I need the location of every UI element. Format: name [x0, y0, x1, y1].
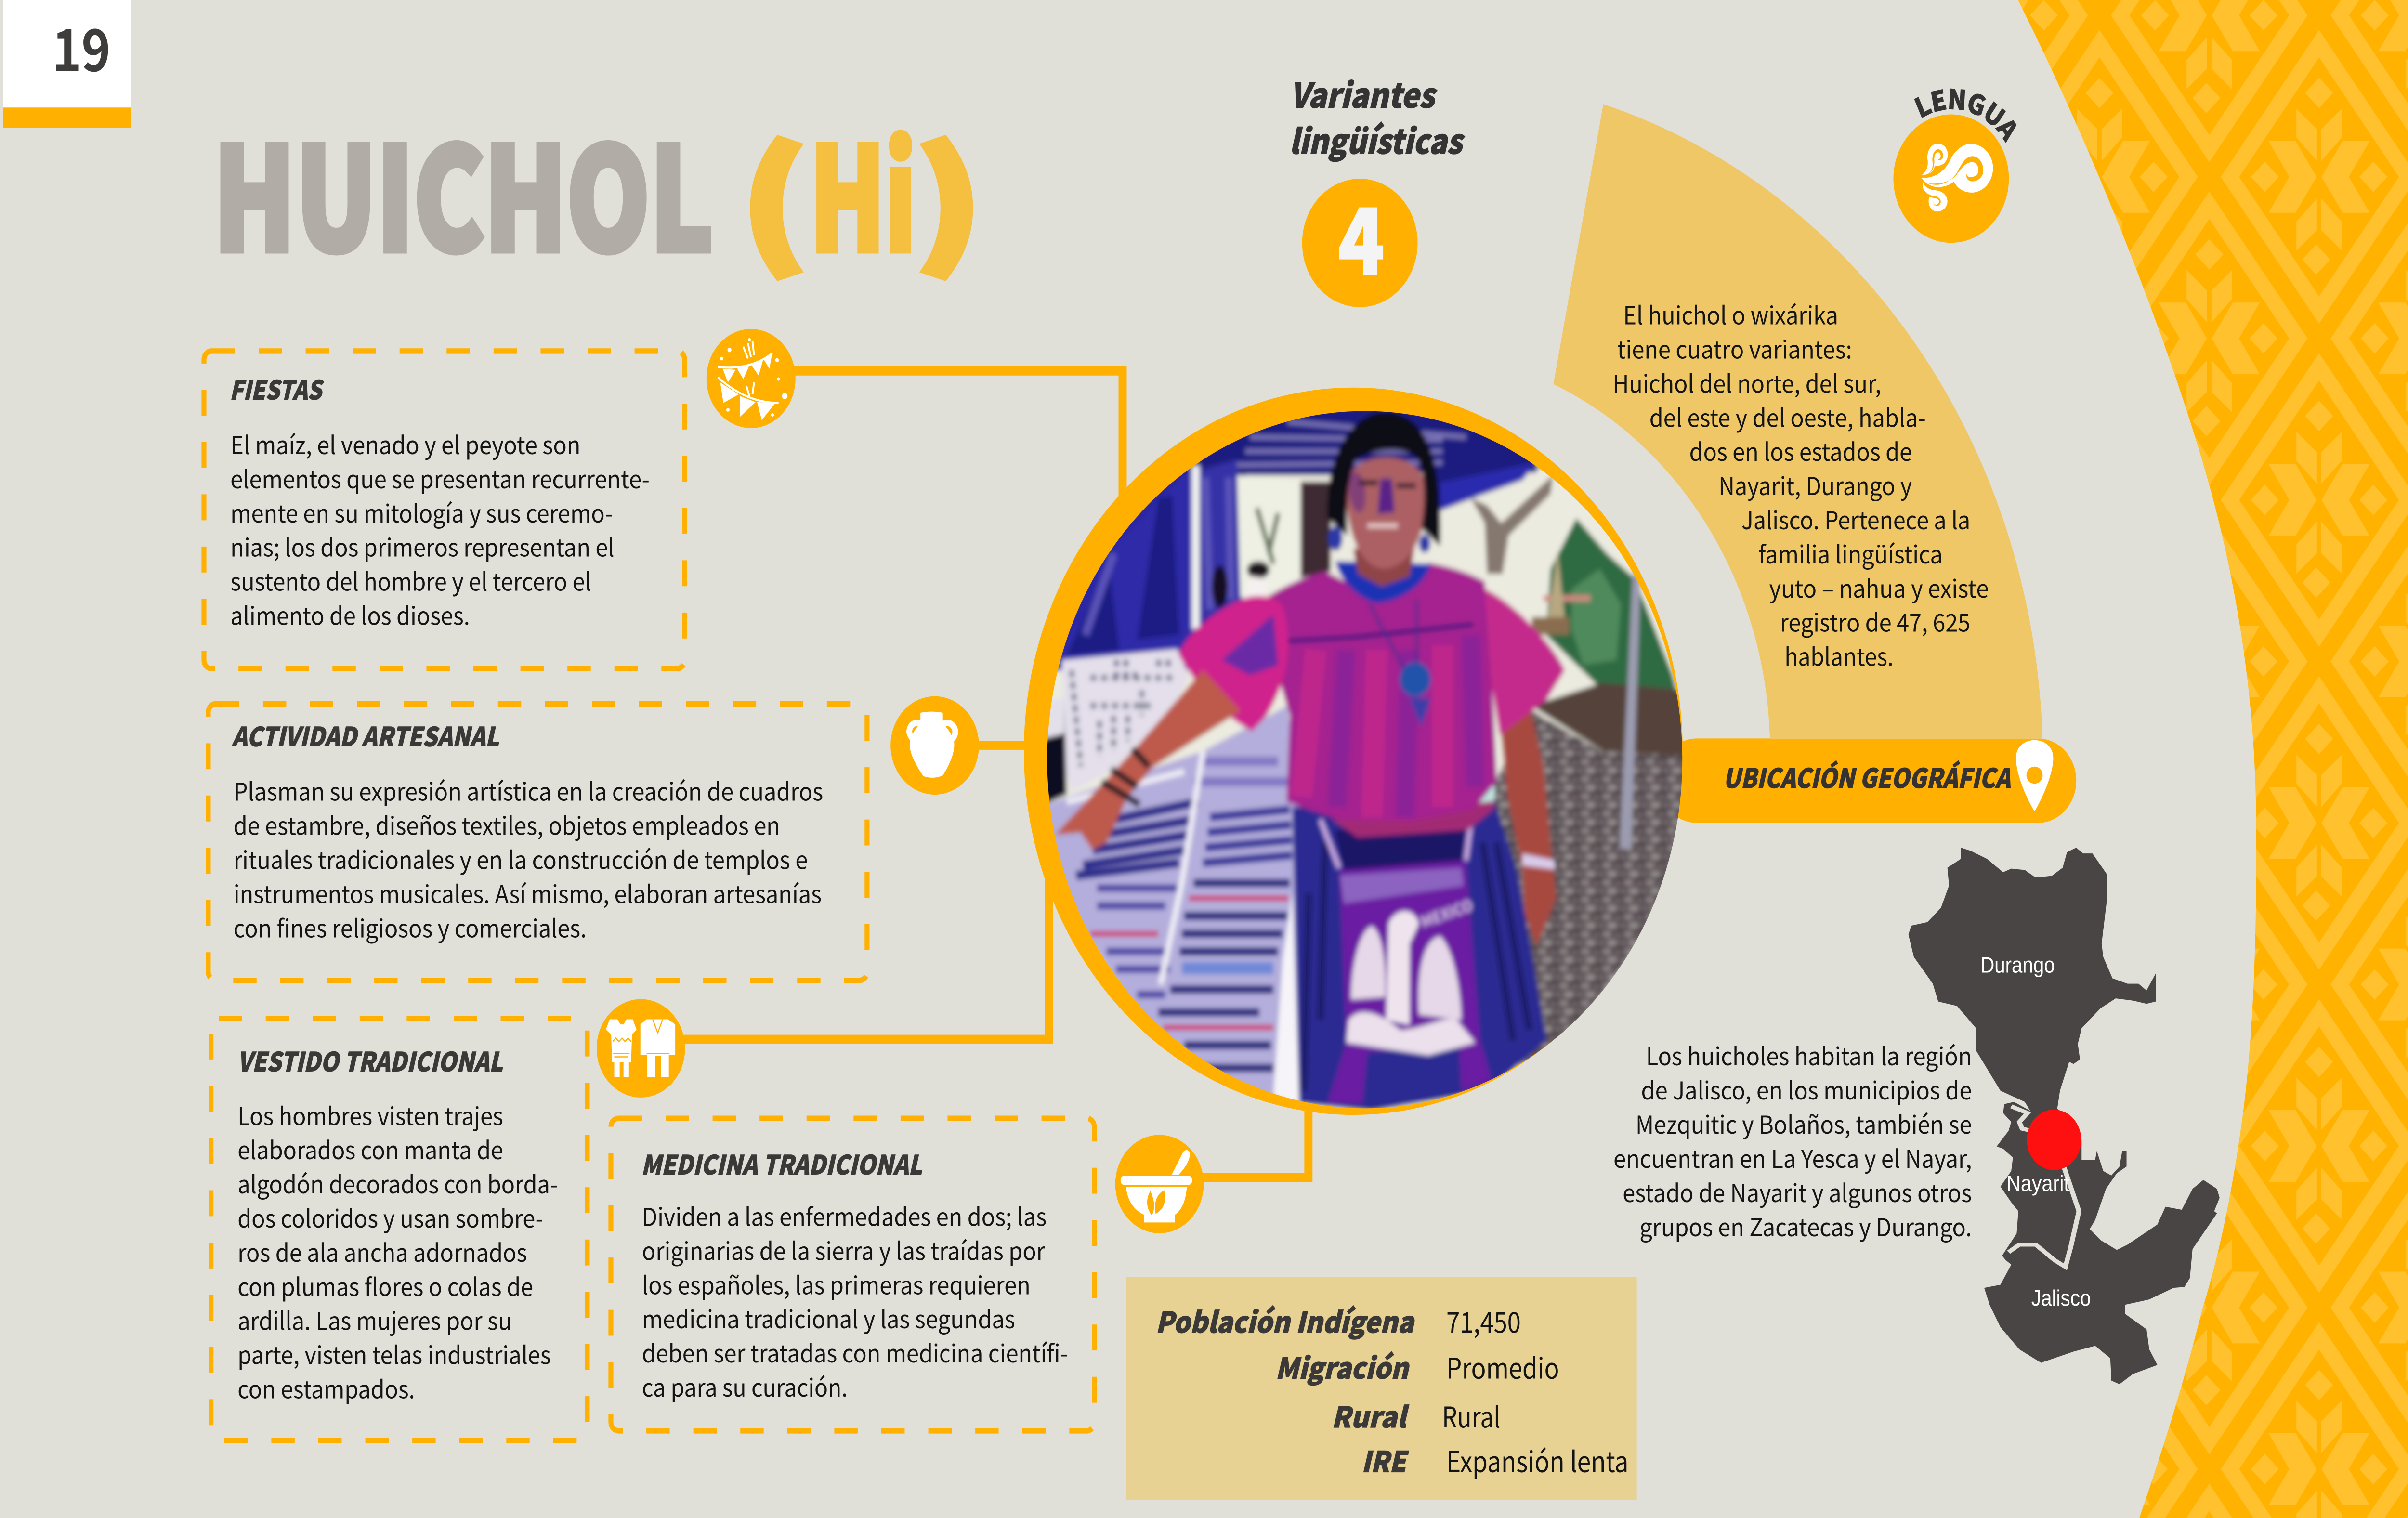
- wedge: lengua description: tiene cuatro variantes:: [1617, 330, 1852, 366]
- map of durango, nayarit and jalisco: [1909, 848, 2220, 1384]
- hair: [1327, 412, 1440, 546]
- text: fiestas: nias; los dos primeros representan el: [230, 528, 615, 563]
- dark earth: [1532, 683, 1691, 761]
- pill: ubicación geográfica: UBICACIÓN GEOGRÁFICA: [1723, 758, 2011, 796]
- neck: [1353, 549, 1414, 587]
- wedge: lengua description: hablantes.: [1784, 638, 1894, 673]
- bead table: [1038, 706, 1306, 1111]
- text: vestido tradicional: elaborados con manta de: [237, 1131, 503, 1166]
- text: fiestas: mente en su mitología y sus ceremo-: [230, 494, 613, 530]
- text: medicina tradicional: medicina tradicional y las segundas: [642, 1300, 1015, 1335]
- blouse: [1178, 563, 1565, 821]
- icon: fiestas bunting: [707, 329, 796, 428]
- title: Hi: [810, 86, 916, 291]
- text: actividad artesanal: [234, 772, 823, 944]
- trees and courtyard: [1469, 476, 1676, 694]
- text: medicina tradicional: ca para su curación.: [642, 1368, 848, 1404]
- panel: datos de población: Expansión lenta: [1446, 1439, 1628, 1480]
- badge: number of variants: 4: [1338, 170, 1385, 300]
- heading: variantes lingüísticas: lingüísticas: [1289, 115, 1466, 164]
- text: ubicación: de Jalisco, en los municipios de: [1641, 1071, 1972, 1107]
- icon: lengua swirl: [1893, 115, 2009, 243]
- title: ): [917, 98, 982, 288]
- collar: [1335, 561, 1431, 603]
- connector lines: [681, 371, 2076, 1178]
- cobblestones: [1490, 711, 1691, 1065]
- dark gap under board: [1038, 701, 1067, 807]
- title: HUICHOL: [213, 86, 713, 291]
- heading: medicina tradicional: MEDICINA TRADICIONAL: [641, 1144, 922, 1182]
- left arm and hand: [1055, 670, 1241, 850]
- text: vestido tradicional: con plumas flores o colas de: [237, 1268, 533, 1303]
- wedge: lengua description: [1553, 104, 2042, 739]
- panel: datos de población: Migración: [1275, 1346, 1410, 1387]
- text: fiestas: alimento de los dioses.: [230, 597, 470, 632]
- badge: number of variants: [1302, 170, 1418, 307]
- icon: mortar and pestle: [1115, 1135, 1204, 1233]
- text: actividad artesanal: de estambre, diseños textiles, objetos empleados en: [234, 807, 780, 842]
- pendant: [1370, 599, 1431, 727]
- central orange ring: [1024, 388, 1683, 1115]
- text: ubicación: encuentran en La Yesca y el Nayar,: [1613, 1139, 1972, 1175]
- text: ubicación: grupos en Zacatecas y Durango.: [1639, 1208, 1972, 1243]
- photo: huichol woman at craft stall: [1038, 407, 1691, 1116]
- wedge: lengua description: del este y del oeste, habla-: [1649, 398, 1926, 434]
- text: medicina tradicional: los españoles, las primeras requieren: [642, 1266, 1031, 1301]
- pole: [1620, 574, 1641, 849]
- panel: datos de población: Población Indígena: [1156, 1300, 1415, 1341]
- awning: [1234, 414, 1541, 513]
- panel: actividad artesanal: [208, 704, 867, 981]
- text: vestido tradicional: con estampados.: [237, 1370, 415, 1405]
- photo background: [1049, 463, 1676, 1109]
- text: medicina tradicional: [642, 1198, 1068, 1404]
- map label: Durango: [1980, 953, 2055, 978]
- panel: vestido tradicional: [211, 1019, 587, 1440]
- panel: datos de población: [1126, 1277, 1637, 1500]
- panel: datos de población: 71,450: [1446, 1300, 1521, 1341]
- text: medicina tradicional: Dividen a las enfermedades en dos; las: [642, 1198, 1047, 1233]
- text: actividad artesanal: rituales tradicionales y en la construcción de templos e: [234, 841, 808, 876]
- text: vestido tradicional: Los hombres visten trajes: [237, 1097, 503, 1132]
- text: vestido tradicional: algodón decorados con borda-: [237, 1165, 558, 1201]
- text: vestido tradicional: ros de ala ancha adornados: [237, 1233, 527, 1269]
- icon: traditional clothes: [597, 999, 685, 1098]
- white cloth by skirt: [1273, 893, 1299, 1106]
- heading: variantes lingüísticas: Variantes: [1290, 69, 1438, 118]
- wedge: lengua description: registro de 47, 625: [1780, 603, 1970, 639]
- text: actividad artesanal: con fines religiosos y comerciales.: [234, 909, 587, 944]
- panel: datos de población: Rural: [1442, 1395, 1500, 1436]
- panel: datos de población: Rural: [1332, 1395, 1410, 1436]
- heading: vestido tradicional: VESTIDO TRADICIONAL: [237, 1041, 503, 1079]
- wedge: lengua description: Nayarit, Durango y: [1718, 467, 1912, 502]
- pill: ubicación geográfica: [1723, 740, 2053, 811]
- panel: datos de población: Promedio: [1446, 1346, 1559, 1387]
- wedge: lengua description: yuto – nahua y existe: [1769, 569, 1989, 605]
- text: ubicación: Los huicholes habitan la región: [1646, 1037, 1972, 1073]
- window and column: [1236, 475, 1331, 600]
- wedge: lengua description: El huichol o wixárika: [1623, 296, 1838, 331]
- heading: lengua: LENGUA: [1914, 89, 2017, 143]
- earrings: [1328, 526, 1430, 553]
- text: vestido tradicional: ardilla. Las mujeres por su: [237, 1302, 511, 1337]
- icon: clay jar: [890, 696, 979, 795]
- text: ubicación: Mezquitic y Bolaños, también se: [1636, 1105, 1972, 1141]
- text: actividad artesanal: instrumentos musicales. Así mismo, elaboran artesanías: [234, 875, 822, 910]
- text: vestido tradicional: dos coloridos y usan sombre-: [237, 1199, 543, 1235]
- wedge: lengua description: dos en los estados de: [1689, 432, 1912, 468]
- woven bag with eagle: [1321, 675, 1492, 1103]
- panel: variantes lingüísticas: [1289, 69, 1466, 307]
- panel: fiestas: [204, 351, 685, 668]
- heading: actividad artesanal: ACTIVIDAD ARTESANAL: [232, 716, 499, 754]
- jewellery board: [1062, 649, 1189, 792]
- skirt: [1292, 799, 1547, 1111]
- panel: datos de población: IRE: [1361, 1439, 1409, 1480]
- heading: variantes lingüísticas: [1289, 69, 1466, 164]
- heading: fiestas: FIESTAS: [230, 369, 324, 407]
- right arm: [1501, 711, 1556, 946]
- title: (: [742, 98, 806, 288]
- woven bag with eagle: MEXICO: [1418, 893, 1475, 932]
- text: vestido tradicional: parte, visten telas industriales: [237, 1336, 551, 1371]
- text: actividad artesanal: Plasman su expresión artística en la creación de cuadros: [234, 772, 823, 808]
- blue curtains: [1038, 460, 1241, 726]
- text: vestido tradicional: [237, 1097, 558, 1405]
- icon: location pin: [2016, 740, 2053, 811]
- text: ubicación: estado de Nayarit y algunos otros: [1623, 1174, 1972, 1209]
- text: fiestas: El maíz, el venado y el peyote son: [230, 426, 580, 461]
- panel: medicina tradicional: [611, 1118, 1094, 1431]
- text: medicina tradicional: originarias de la sierra y las traídas por: [642, 1232, 1045, 1267]
- wedge: lengua description: Jalisco. Pertenece a la: [1741, 501, 1970, 537]
- text: fiestas: [230, 426, 650, 632]
- marker: huichol region: [2027, 1110, 2081, 1170]
- text: ubicación: [1613, 1037, 1972, 1243]
- face: [1346, 458, 1426, 569]
- text: fiestas: sustento del hombre y el tercero el: [230, 563, 591, 598]
- waist sash: [1332, 786, 1495, 838]
- wedge: lengua description: Huichol del norte, del sur,: [1612, 365, 1881, 400]
- page number tab: [3, 0, 131, 128]
- wedge: lengua description: familia lingüística: [1758, 535, 1943, 571]
- text: fiestas: elementos que se presentan recurrente-: [230, 460, 650, 496]
- page number: 19: [52, 4, 111, 89]
- map label: Nayarit: [2006, 1171, 2069, 1196]
- map label: Jalisco: [2031, 1286, 2091, 1311]
- text: medicina tradicional: deben ser tratadas con medicina científi-: [642, 1334, 1068, 1370]
